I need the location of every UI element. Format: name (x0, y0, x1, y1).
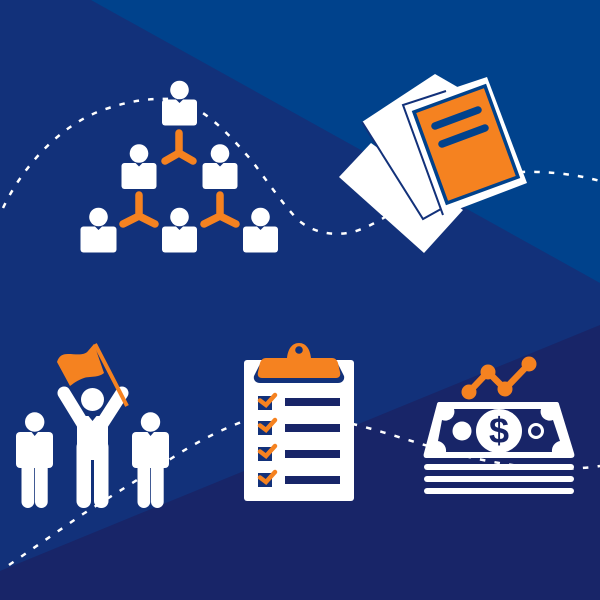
person left (16, 412, 53, 508)
connector left (123, 195, 155, 224)
middle sheet edge (362, 122, 441, 219)
stack lines (424, 464, 574, 494)
flag pole (95, 344, 127, 406)
board (244, 360, 354, 501)
person bottom left (80, 208, 116, 252)
flag (57, 344, 104, 386)
dashed path: bottom (9, 416, 600, 565)
person top (162, 81, 197, 126)
dollar sign: $ (489, 410, 509, 451)
background: top right band (91, 0, 600, 283)
front sheet edge (403, 91, 446, 215)
clipboard icon (244, 343, 354, 501)
person mid left (122, 144, 156, 189)
cover line 1 (435, 110, 478, 126)
clip (254, 343, 344, 383)
dashed path: top (3, 99, 600, 234)
connector top (165, 133, 193, 161)
checklist row 1 (258, 395, 340, 410)
cover line 2 (442, 128, 485, 144)
person center (64, 388, 122, 508)
checklist row 4 (258, 472, 340, 487)
banknote (424, 402, 574, 458)
person bottom right (243, 208, 278, 252)
person bottom middle (162, 208, 197, 252)
orange cover (414, 86, 518, 203)
back sheet (339, 143, 463, 253)
org chart icon (80, 81, 278, 252)
front sheet (403, 77, 527, 215)
money with growth chart icon (424, 356, 574, 494)
connector right (204, 195, 236, 224)
documents icon (339, 74, 527, 253)
checklist row 3 (258, 446, 340, 461)
background: bottom band (0, 325, 600, 600)
person mid right (202, 144, 238, 189)
growth chart (462, 356, 536, 400)
checklist row 2 (258, 420, 340, 435)
person right (132, 412, 169, 508)
middle sheet (362, 74, 480, 219)
team with flag icon (16, 344, 169, 508)
